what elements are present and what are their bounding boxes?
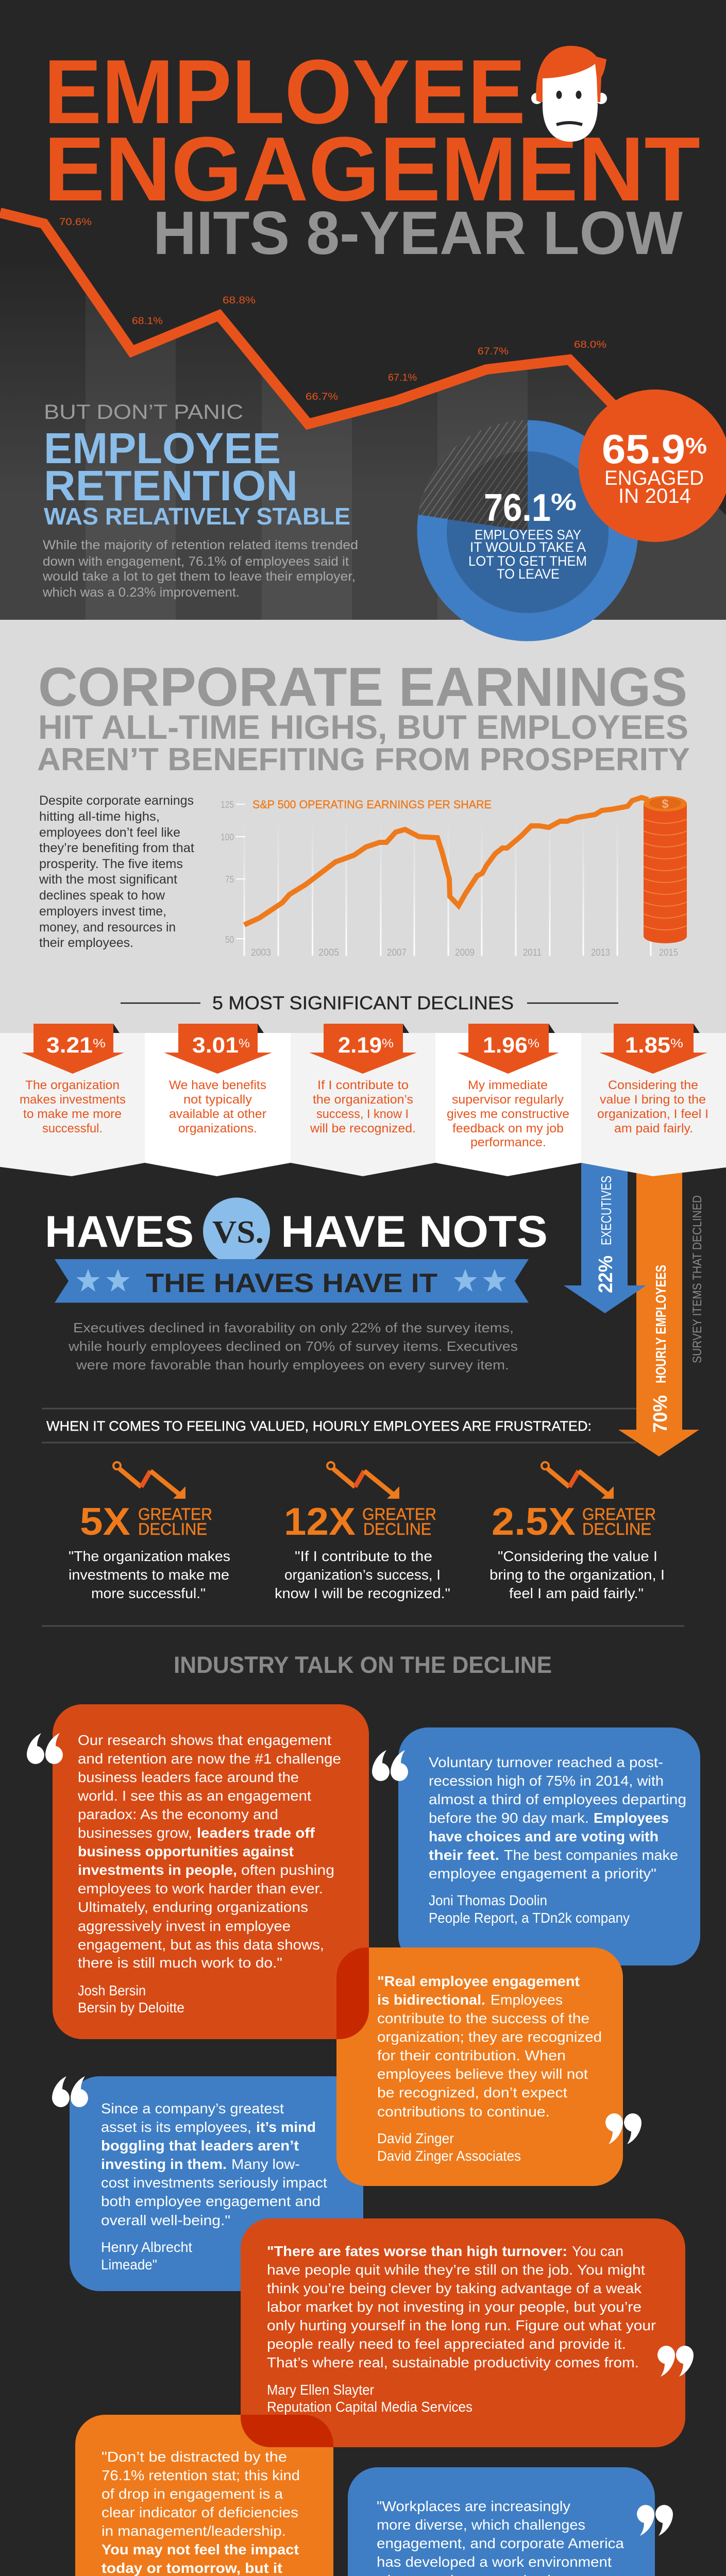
engagement decline line chart: 67.1% — [388, 372, 417, 383]
stat: 2.5X greater decline: GREATER — [582, 1505, 656, 1523]
text block: earnings explanation: hitting all-time highs, — [39, 809, 160, 824]
panel: decline 3.01%: 3.01 — [192, 1033, 239, 1058]
stat: 12X greater decline: know I will be recognized." — [275, 1585, 450, 1601]
pie chart: 76.1% retention: IT WOULD TAKE A — [470, 539, 586, 555]
panel: quote Mary Ellen Slayter: labor market by not investing in your people, but you’re — [267, 2299, 641, 2315]
stat: 12X greater decline: 12X — [284, 1500, 356, 1543]
icon: close quote — [605, 2113, 641, 2144]
heading: corporate earnings: HIT ALL-TIME HIGHS, BUT EMPLOYEES — [38, 708, 688, 746]
panel: quote Josh Bersin: business leaders face around the — [78, 1769, 299, 1785]
icon: close quote — [637, 2505, 673, 2536]
panel: decline 2.19%: will be recognized. — [310, 1122, 416, 1136]
panel: quote Joni Thomas Doolin: their feet. — [429, 1847, 499, 1863]
panel: decline 1.85%: organization, I feel I — [597, 1107, 708, 1121]
retention text block: RETENTION — [44, 462, 298, 510]
text block: executives vs hourly: while hourly employees declined on 70% of survey items. Executives — [68, 1338, 518, 1354]
text block: earnings explanation: money, and resources in — [39, 920, 176, 935]
panel: decline 1.96%: supervisor regularly — [452, 1093, 564, 1107]
panel: quote Henry Albrecht — [52, 2076, 363, 2291]
text block: earnings explanation — [39, 793, 194, 950]
panel: quote Joni Thomas Doolin: have choices and are voting with — [429, 1828, 659, 1844]
text block: executives vs hourly: Executives declined in favorability on only 22% of the survey items, — [73, 1320, 514, 1335]
chart: S&P 500 operating earnings per share: S&P 500 OPERATING EARNINGS PER SHARE — [252, 798, 492, 811]
heading: haves vs. have nots: HAVE NOTS — [281, 1207, 548, 1257]
engagement decline line chart: 66.7% — [306, 392, 338, 402]
panel: quote Mark Hirschfeld: more diverse, which challenges — [377, 2517, 585, 2533]
chart: S&P 500 operating earnings per share: 2005 — [318, 947, 339, 958]
text block: earnings explanation: employers invest time, — [39, 904, 166, 919]
chart: S&P 500 operating earnings per share: 2007 — [387, 947, 407, 958]
panel: quote Mary Ellen Slayter: have people quit while they’re still on the job. You might — [267, 2262, 645, 2278]
chart: S&P 500 operating earnings per share: 2003 — [251, 947, 271, 958]
stat: 5X greater decline: more successful." — [91, 1585, 206, 1601]
panel: quote David Zinger: contributions to continue. — [377, 2104, 550, 2120]
panel: decline 2.19%: If I contribute to — [317, 1078, 409, 1092]
panel: decline 3.21%: % — [93, 1037, 106, 1050]
heading: haves vs. have nots: VS. — [212, 1215, 264, 1250]
panel: decline 3.21%: successful. — [42, 1122, 103, 1136]
panel: quote David Zinger: be recognized, don’t expect — [377, 2084, 567, 2100]
arrow: executives 22%: EXECUTIVES — [598, 1176, 614, 1245]
panel: quote Josh Bersin: Bersin by Deloitte — [78, 1999, 184, 2015]
panel: quote Joni Thomas Doolin: Joni Thomas Doolin — [429, 1892, 547, 1908]
panel: quote David Zinger: organization; they are recognized — [377, 2029, 602, 2045]
stat: 5X greater decline: GREATER — [138, 1505, 212, 1523]
arrow: executives 22% — [564, 1163, 646, 1313]
panel: quote Henry Albrecht: Since a company’s greatest — [101, 2100, 284, 2116]
panel: quote Josh Bersin — [27, 1704, 369, 2039]
panel: decline 3.21%: to make me more — [23, 1107, 122, 1121]
callout: 65.9% engaged: IN 2014 — [618, 485, 691, 507]
panel: quote Henry Albrecht: boggling that leaders aren’t — [101, 2138, 299, 2154]
text block: executives vs hourly: were more favorable than hourly employees on every survey item. — [76, 1357, 509, 1372]
chart: S&P 500 operating earnings per share: 75 — [225, 874, 234, 885]
icon: decline zigzag arrow — [327, 1462, 399, 1499]
panel: quote Joni Thomas Doolin: Voluntary turnover reached a post- — [429, 1754, 663, 1770]
panel: quote Henry Albrecht: both employee engagement and — [101, 2193, 320, 2209]
panel: quote Mark Hirschfeld — [348, 2467, 673, 2576]
panel: decline 1.85%: value I bring to the — [600, 1093, 706, 1107]
panel: decline 2.19%: 2.19 — [338, 1033, 382, 1058]
panel: quote Josh Bersin: and retention are now the #1 challenge — [78, 1751, 341, 1767]
retention text block: down with engagement, 76.1% of employees said it — [43, 554, 349, 569]
panel: quote Josh Bersin: Ultimately, enduring organizations — [78, 1899, 308, 1915]
panel: quote Josh Bersin: employees to work harder than ever. — [78, 1880, 323, 1896]
panel: quote Joni Thomas Doolin: recession high of 75% in 2014, with — [429, 1773, 664, 1789]
arrow: hourly employees 70%: 70% — [650, 1395, 671, 1433]
text block: earnings explanation: they’re benefiting from that — [39, 841, 194, 855]
text block: earnings explanation: with the most significant — [39, 872, 177, 887]
pie chart: 76.1% retention: % — [551, 488, 577, 515]
panel: quote Joni Thomas Doolin: almost a third of employees departing — [429, 1791, 686, 1807]
panel: decline 1.96%: % — [528, 1037, 539, 1050]
stat: 5X greater decline: investments to make me — [69, 1567, 229, 1583]
text block: earnings explanation: Despite corporate earnings — [39, 793, 194, 808]
panel: decline 2.19% — [291, 1024, 435, 1176]
icon: decline zigzag arrow — [113, 1462, 185, 1499]
pie chart: 76.1% retention: EMPLOYEES SAY — [475, 527, 581, 543]
panel: quote Josh Bersin: Josh Bersin — [78, 1982, 146, 1998]
callout: 65.9% engaged: ENGAGED — [604, 467, 704, 489]
panel: decline 3.01%: % — [239, 1037, 250, 1050]
panel: quote Josh Allan Dykstra: "Don’t be distracted by the — [102, 2449, 287, 2465]
heading: hourly employees frustrated — [42, 1409, 684, 1626]
chart: S&P 500 operating earnings per share: 100 — [221, 832, 234, 842]
panel: quote Josh Bersin: paradox: As the economy and — [78, 1806, 278, 1822]
panel: quote David Zinger — [336, 1947, 641, 2186]
panel: decline 2.19%: success, I know I — [316, 1107, 409, 1121]
title: EMPLOYEE — [44, 41, 526, 143]
panel: quote Henry Albrecht: it’s mind — [256, 2119, 316, 2135]
stat: 12X greater decline: DECLINE — [363, 1520, 431, 1538]
dark section background — [0, 1154, 726, 2576]
title: HITS 8-YEAR LOW — [153, 199, 683, 267]
panel: quote Mary Ellen Slayter: people really need to feel appreciated and provide it. — [267, 2336, 626, 2352]
panel: decline 1.96%: 1.96 — [483, 1033, 528, 1058]
text block: earnings explanation: their employees. — [39, 936, 133, 950]
panel: decline 1.96% — [435, 1024, 581, 1176]
chart: S&P 500 operating earnings per share — [221, 796, 687, 958]
header background — [0, 0, 726, 620]
panel: decline 3.01%: organizations. — [178, 1122, 257, 1136]
panel: quote Josh Bersin: leaders trade off — [197, 1825, 315, 1841]
panel: decline 3.21%: makes investments — [20, 1093, 126, 1107]
panel: quote Josh Bersin: businesses grow, — [78, 1825, 192, 1841]
retention text block — [42, 401, 358, 600]
chart: S&P 500 operating earnings per share: 2013 — [591, 947, 610, 958]
panel: quote David Zinger: Employees — [491, 1992, 563, 2008]
stat: 2.5X greater decline: "Considering the value I — [498, 1548, 657, 1564]
engagement decline line chart — [0, 213, 654, 464]
panel: decline 1.96%: feedback on my job — [452, 1122, 564, 1136]
chart: S&P 500 operating earnings per share: 125 — [221, 800, 234, 810]
panel: quote Mary Ellen Slayter — [241, 2218, 694, 2447]
retention text block: WAS RELATIVELY STABLE — [44, 503, 350, 530]
panel: quote Joni Thomas Doolin: before the 90 day mark. — [429, 1810, 589, 1826]
icon: coin stack: $ — [662, 797, 669, 811]
stat: 5X greater decline: 5X — [80, 1500, 130, 1543]
panel: quote Henry Albrecht: cost investments seriously impact — [101, 2175, 327, 2191]
panel: quote Mary Ellen Slayter: "There are fates worse than high turnover: — [267, 2243, 567, 2259]
callout: 65.9% engaged: % — [685, 433, 707, 459]
panel: decline 2.19%: % — [382, 1037, 394, 1050]
text block: executives vs hourly — [68, 1320, 518, 1372]
panel: quote Joni Thomas Doolin: Employees — [594, 1810, 669, 1826]
panel: decline 1.85% — [581, 1024, 726, 1176]
chart: S&P 500 operating earnings per share: 2009 — [455, 947, 475, 958]
engagement decline line chart: 67.7% — [478, 346, 509, 357]
panel: quote Mark Hirschfeld: has developed a work environment — [377, 2554, 612, 2570]
panel: quote David Zinger: for their contribution. When — [377, 2047, 566, 2063]
pie chart: 76.1% retention: LOT TO GET THEM — [468, 553, 587, 569]
icon: unhappy employee face — [531, 46, 607, 142]
stat: 12X greater decline: GREATER — [362, 1505, 436, 1523]
panel: quote Joni Thomas Doolin — [372, 1727, 700, 1965]
panel: quote Josh Allan Dykstra: clear indicator of deficiencies — [102, 2504, 298, 2520]
arrow: executives 22%: 22% — [595, 1256, 617, 1293]
panel: quote Josh Allan Dykstra: of drop in engagement is a — [102, 2486, 283, 2502]
panel: decline 1.85%: Considering the — [608, 1078, 698, 1092]
stat: 2.5X greater decline: 2.5X — [492, 1500, 576, 1543]
panel: decline 1.85%: am paid fairly. — [614, 1122, 693, 1136]
pie chart: 76.1% retention: TO LEAVE — [497, 566, 560, 582]
panel: quote Josh Bersin: aggressively invest in employee — [78, 1918, 291, 1934]
engagement decline line chart: 70.6% — [59, 217, 92, 228]
icon: open quote — [27, 1733, 63, 1764]
stat: 5X greater decline: "The organization makes — [69, 1548, 230, 1564]
chart: S&P 500 operating earnings per share: 2011 — [523, 947, 542, 958]
retention text block: would take a lot to get them to leave their employer, — [42, 569, 356, 584]
panel: quote Josh Bersin: often pushing — [241, 1862, 334, 1878]
stat: 5X greater decline — [69, 1462, 230, 1601]
panel: decline 3.01%: not typically — [183, 1093, 252, 1107]
panel: quote Mary Ellen Slayter: Mary Ellen Slayter — [267, 2382, 374, 2398]
engagement decline line chart: 68.8% — [223, 295, 256, 306]
panel: quote Joni Thomas Doolin: employee engagement a priority" — [429, 1866, 656, 1882]
panel: quote Mark Hirschfeld: "Workplaces are increasingly — [377, 2498, 570, 2514]
panel: quote Mary Ellen Slayter: You can — [572, 2243, 623, 2259]
chart: S&P 500 operating earnings per share: 50 — [225, 935, 234, 945]
icon: open quote — [372, 1750, 408, 1781]
panel: decline 1.96%: performance. — [470, 1136, 546, 1149]
panel: quote Mary Ellen Slayter: Reputation Capital Media Services — [267, 2399, 472, 2415]
panel: quote Josh Bersin: engagement, but as this data shows, — [78, 1937, 324, 1953]
panel: quote David Zinger: David Zinger — [377, 2130, 454, 2146]
panel: quote David Zinger: employees believe they will not — [377, 2066, 588, 2082]
arrow: hourly employees 70% — [618, 1163, 699, 1456]
retention text block: BUT DON’T PANIC — [44, 401, 243, 423]
panel: decline 3.21%: The organization — [25, 1078, 120, 1092]
retention text block: EMPLOYEE — [44, 424, 281, 472]
panel: quote Josh Allan Dykstra — [75, 2415, 333, 2576]
stat: 12X greater decline: organization’s success, I — [284, 1567, 441, 1583]
engagement decline line chart: 68.0% — [574, 340, 606, 350]
text block: earnings explanation: employees don’t feel like — [39, 825, 180, 840]
panel: quote Mary Ellen Slayter: think you’re being clever by taking advantage of a weak — [267, 2280, 642, 2296]
title: ENGAGEMENT — [44, 118, 700, 220]
panel: quote Josh Bersin: Our research shows that engagement — [78, 1732, 331, 1748]
callout: 65.9% engaged — [579, 389, 726, 542]
heading: 5 most significant declines: 5 MOST SIGNIFICANT DECLINES — [212, 992, 514, 1013]
heading: industry talk on the decline: INDUSTRY TALK ON THE DECLINE — [174, 1652, 552, 1678]
callout: 65.9% engaged: 65.9 — [602, 426, 685, 472]
panel: quote Josh Allan Dykstra: You may not feel the impact — [102, 2541, 299, 2557]
stat: 2.5X greater decline: bring to the organization, I — [489, 1567, 665, 1583]
icon: decline zigzag arrow — [542, 1462, 614, 1499]
panel: quote Mary Ellen Slayter: That’s where real, sustainable productivity comes from. — [267, 2354, 639, 2370]
panel: decline 3.21%: 3.21 — [46, 1033, 93, 1058]
panel: quote Josh Allan Dykstra: today or tomorrow, but it — [102, 2560, 282, 2576]
chart: S&P 500 operating earnings per share: 2015 — [659, 947, 678, 958]
pie chart: 76.1% retention — [417, 420, 638, 641]
icon: close quote — [657, 2346, 694, 2377]
icon: coin stack — [644, 796, 687, 943]
panel: quote Henry Albrecht: Many low- — [231, 2156, 300, 2172]
panel: quote Henry Albrecht: Limeade" — [101, 2257, 157, 2273]
panel: quote Josh Allan Dykstra: in management/leadership. — [102, 2523, 286, 2539]
panel: quote David Zinger: contribute to the success of the — [377, 2010, 589, 2026]
text block: earnings explanation: prosperity. The five items — [39, 857, 183, 871]
panel: decline 1.96%: gives me constructive — [447, 1107, 569, 1121]
heading: haves vs. have nots: HAVES — [45, 1207, 194, 1257]
panel: quote Henry Albrecht: asset is its employees, — [101, 2119, 251, 2135]
stat: 2.5X greater decline: DECLINE — [582, 1520, 651, 1538]
icon: open quote — [52, 2076, 88, 2107]
pie chart: 76.1% retention: 76.1 — [484, 486, 551, 529]
ribbon: the haves have it: THE HAVES HAVE IT — [146, 1268, 437, 1298]
heading: haves vs. have nots — [45, 1197, 548, 1264]
panel: decline 1.96%: My immediate — [468, 1078, 548, 1092]
title — [44, 41, 700, 267]
text block: earnings explanation: declines speak to how — [39, 888, 165, 903]
stat: 12X greater decline: "If I contribute to the — [295, 1548, 432, 1564]
heading: corporate earnings: CORPORATE EARNINGS — [38, 656, 687, 718]
panel: quote David Zinger: "Real employee engagement — [377, 1973, 580, 1989]
panel: quote Josh Bersin: investments in people, — [78, 1862, 237, 1878]
ribbon: the haves have it — [55, 1259, 529, 1302]
stat: 5X greater decline: DECLINE — [138, 1520, 207, 1538]
panel: decline 3.01% — [145, 1024, 291, 1176]
stat: 2.5X greater decline: feel I am paid fairly." — [509, 1585, 644, 1601]
panel: decline 3.21% — [0, 1024, 145, 1176]
panel: quote Henry Albrecht: overall well-being." — [101, 2212, 230, 2228]
heading: corporate earnings: AREN’T BENEFITING FROM PROSPERITY — [37, 742, 690, 777]
panel: quote Henry Albrecht: investing in them. — [101, 2156, 227, 2172]
heading: corporate earnings — [37, 656, 690, 777]
panel: quote Joni Thomas Doolin: The best companies make — [504, 1847, 678, 1863]
panel: quote Josh Bersin: there is still much work to do." — [78, 1955, 282, 1971]
panel: quote David Zinger: David Zinger Associates — [377, 2148, 521, 2164]
engagement decline line chart: 68.1% — [132, 316, 163, 327]
panel: decline 2.19%: the organization’s — [313, 1093, 413, 1107]
arrow: hourly employees 70%: HOURLY EMPLOYEES — [653, 1265, 669, 1383]
panel: quote Josh Bersin: business opportunities against — [78, 1843, 294, 1859]
panel: quote Mary Ellen Slayter: only hurting yourself in the long run. Figure out what your — [267, 2317, 656, 2333]
retention text block: which was a 0.23% improvement. — [42, 585, 240, 600]
panel: quote Henry Albrecht: Henry Albrecht — [101, 2239, 192, 2255]
panel: decline 1.85%: % — [670, 1037, 683, 1050]
panel: decline 1.85%: 1.85 — [625, 1033, 670, 1058]
panel: decline 3.01%: available at other — [169, 1107, 266, 1121]
label: survey items that declined: SURVEY ITEMS THAT DECLINED — [690, 1195, 704, 1363]
retention text block: While the majority of retention related items trended — [43, 538, 358, 552]
panel: decline 3.01%: We have benefits — [169, 1078, 266, 1092]
heading: hourly employees frustrated: WHEN IT COMES TO FEELING VALUED, HOURLY EMPLOYEES ARE FRUSTRATED: — [46, 1418, 592, 1434]
panel: quote Mark Hirschfeld: engagement, and corporate America — [377, 2535, 624, 2551]
stat: 12X greater decline — [275, 1462, 450, 1601]
panel: quote Joni Thomas Doolin: People Report, a TDn2k company — [429, 1910, 630, 1926]
panel: quote Josh Allan Dykstra: 76.1% retention stat; this kind — [102, 2467, 300, 2483]
panel: quote David Zinger: is bidirectional. — [377, 1992, 485, 2008]
stat: 2.5X greater decline — [489, 1462, 665, 1601]
panel: quote Josh Bersin: world. I see this as an engagement — [77, 1788, 311, 1804]
panel: corporate earnings background — [0, 620, 726, 1033]
